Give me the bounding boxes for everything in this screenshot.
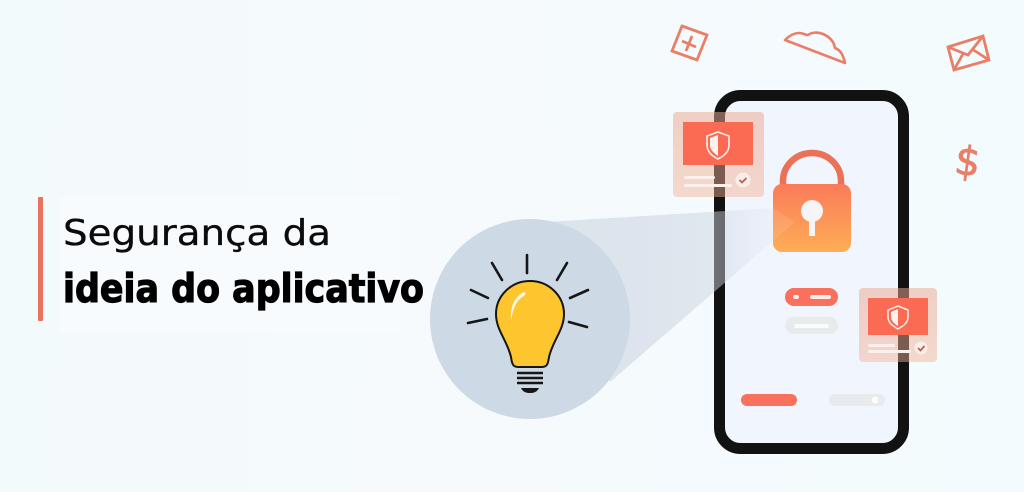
- lightbulb circle: [430, 219, 630, 419]
- phone: [720, 96, 904, 448]
- icon: plus box: [672, 26, 707, 60]
- shield icon: [888, 306, 908, 329]
- light beam: [545, 208, 795, 382]
- shield icon: [707, 132, 729, 159]
- heading line 1: Segurança da: [63, 213, 331, 254]
- security card top left: [673, 112, 764, 197]
- toggle: gray bar: [829, 394, 885, 406]
- heading line 2: ideia do aplicativo: [63, 267, 424, 312]
- icon: cloud: [785, 33, 845, 63]
- title panel: [38, 197, 424, 332]
- check badge: [914, 342, 928, 354]
- light rays: [468, 255, 588, 327]
- check badge: [736, 172, 750, 188]
- action: red bar: [741, 394, 797, 406]
- button: red pill: [785, 288, 838, 306]
- icon: dollar: $: [952, 137, 984, 187]
- security card bottom right: [859, 288, 937, 362]
- button: gray pill: [785, 317, 838, 334]
- lightbulb: [496, 281, 564, 393]
- lock icon: [773, 153, 851, 252]
- icon: envelope: [948, 36, 989, 70]
- accent bar: [38, 197, 43, 321]
